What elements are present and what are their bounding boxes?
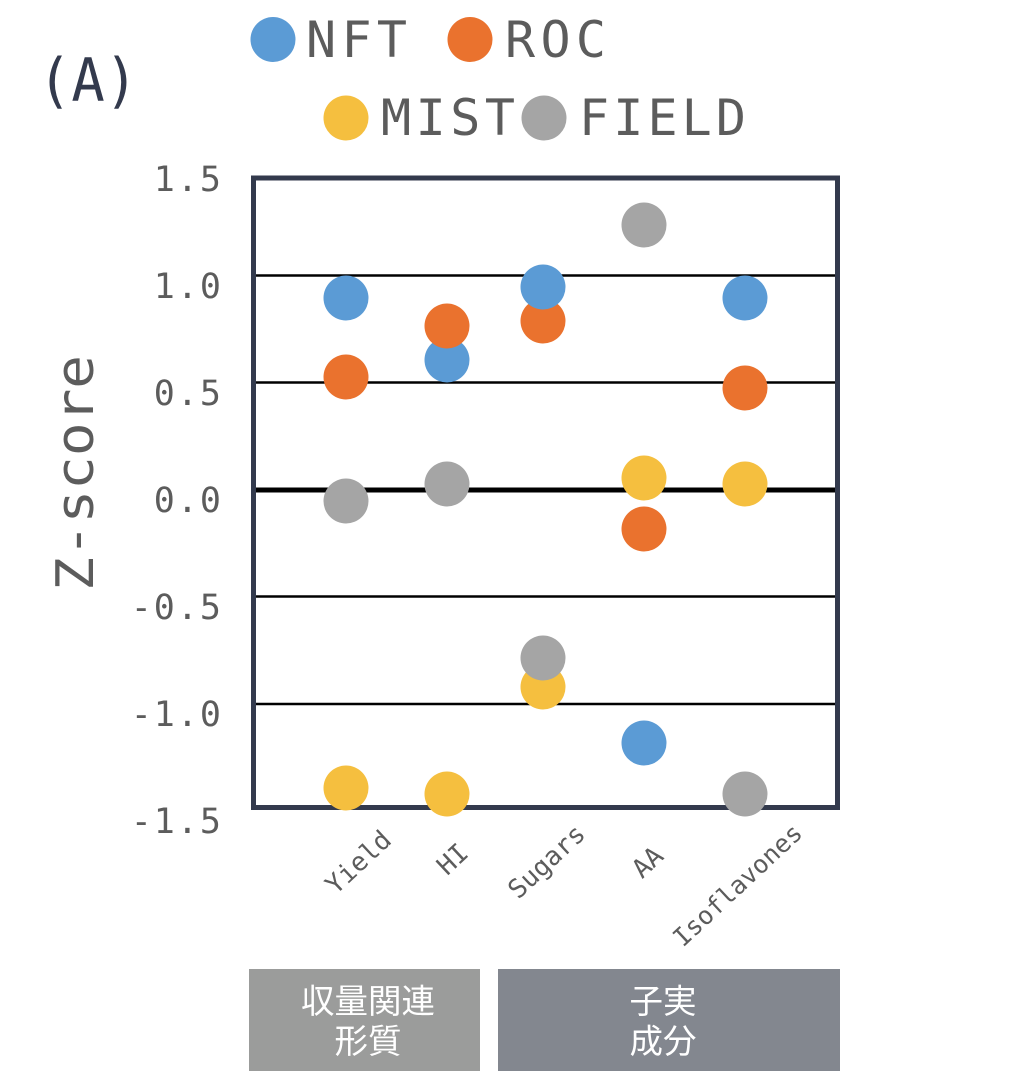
x axis labels: Sugars: [503, 819, 592, 905]
y axis tick labels: 0.5: [154, 374, 223, 414]
panel label (A): (A): [38, 46, 138, 116]
dots: Sugars: [520, 264, 566, 710]
legend: FIELD: [579, 89, 746, 147]
y axis tick labels: -1.0: [131, 695, 223, 735]
x axis labels: Yield: [320, 825, 398, 901]
category box: yield traits: 収量関連: [301, 984, 435, 1021]
category box: yield traits: 形質: [334, 1024, 402, 1061]
category box: seed components: 成分: [630, 1024, 696, 1061]
chart gridlines: [254, 276, 837, 704]
category box: seed components: [498, 969, 840, 1071]
y axis tick labels: -0.5: [131, 588, 223, 628]
legend: [250, 11, 746, 147]
y axis tick labels: 1.0: [154, 267, 223, 307]
dots: AA: [622, 202, 666, 766]
dots: HI: [424, 304, 470, 816]
x axis labels: Isoflavones: [667, 818, 808, 952]
legend: NFT: [306, 11, 407, 69]
category box: yield traits: [249, 969, 480, 1071]
category box: seed components: 子実: [630, 984, 696, 1021]
dots: Isoflavones: [722, 276, 768, 816]
y axis tick labels: 0.0: [154, 481, 223, 521]
legend: ROC: [505, 11, 606, 69]
legend: MIST: [381, 89, 515, 147]
x axis labels: [320, 818, 808, 952]
y axis title: Z-score: [46, 355, 106, 591]
dots: Yield: [324, 276, 368, 810]
chart frame: [254, 178, 838, 808]
y axis tick labels: 1.5: [154, 160, 223, 200]
x axis labels: AA: [626, 841, 670, 884]
x axis labels: HI: [431, 838, 475, 881]
y axis tick labels: [131, 160, 223, 842]
y axis tick labels: -1.5: [131, 802, 223, 842]
